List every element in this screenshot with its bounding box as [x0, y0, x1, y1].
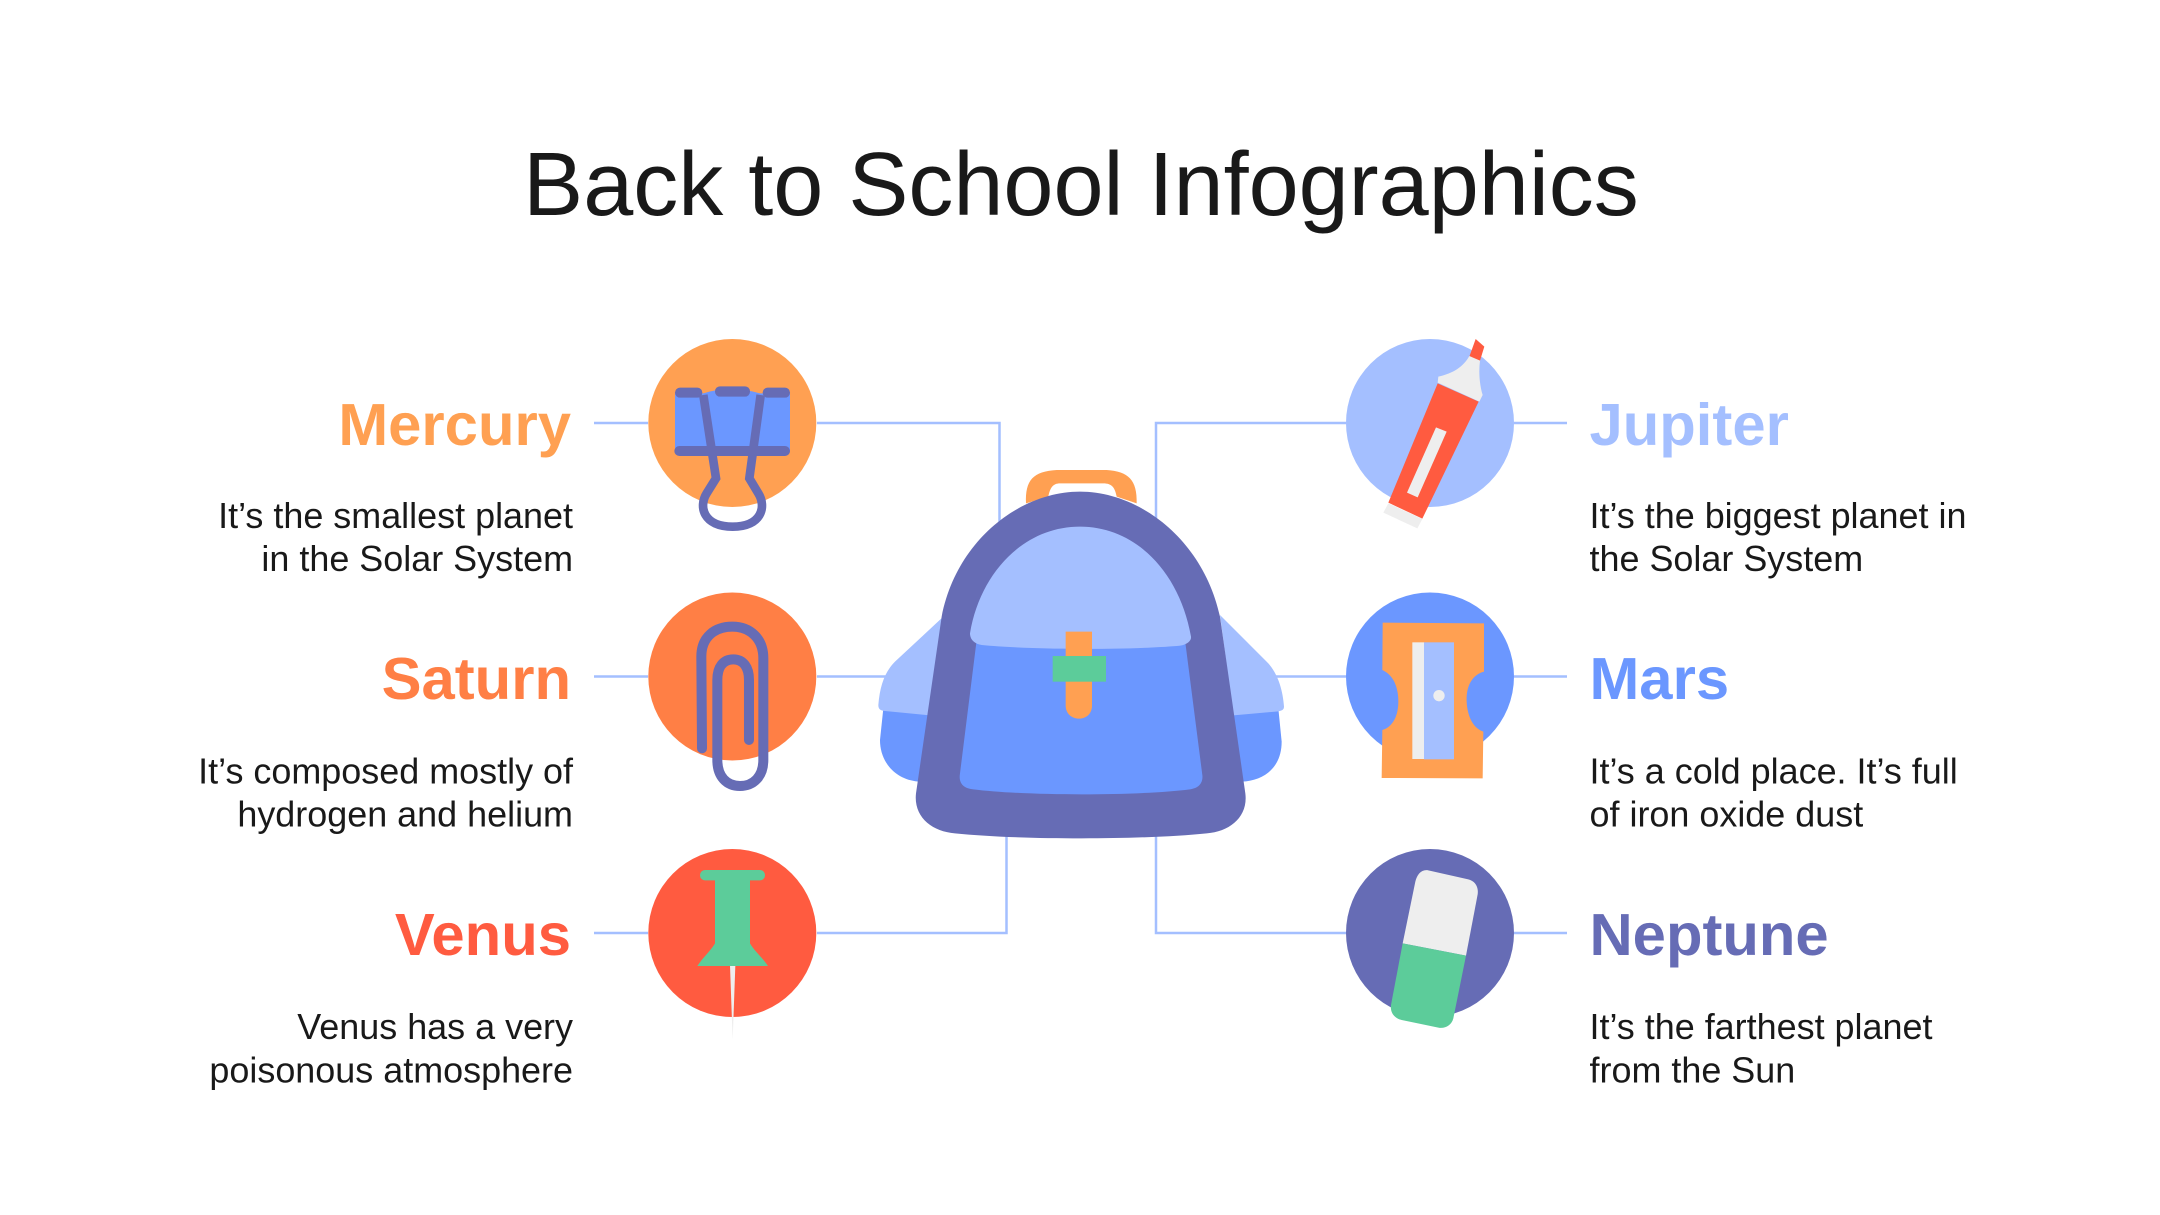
backpack side pocket right	[1233, 708, 1282, 782]
text: Venus description: Venus has a very	[297, 1006, 573, 1047]
backpack handle	[1026, 470, 1137, 503]
panel: Mercury	[218, 339, 816, 579]
title: Back to School Infographics	[523, 135, 1639, 235]
text: Neptune description: It’s the farthest planet	[1590, 1006, 1932, 1047]
backpack buckle	[1053, 656, 1106, 682]
text: Venus description: poisonous atmosphere	[209, 1050, 573, 1090]
heading: Venus: Venus	[395, 901, 571, 968]
panel: Jupiter	[1346, 339, 1966, 579]
text: Saturn description: hydrogen and helium	[237, 794, 573, 834]
connector lines	[594, 423, 1567, 933]
icon: pencil sharpener	[1382, 623, 1484, 778]
icon circle: Jupiter	[1346, 339, 1514, 507]
backpack side flap left	[878, 617, 943, 715]
text: Jupiter description: the Solar System	[1590, 538, 1863, 579]
icon: paper clip	[701, 627, 763, 786]
backpack side pocket left	[880, 708, 932, 782]
backpack side flap right	[1220, 615, 1284, 715]
icon circle: Neptune	[1346, 849, 1514, 1017]
text: Mars description: of iron oxide dust	[1590, 794, 1863, 834]
heading: Neptune: Neptune	[1590, 901, 1829, 968]
panel: Neptune	[1346, 849, 1932, 1090]
backpack front pocket	[960, 640, 1202, 794]
heading: Saturn: Saturn	[382, 645, 571, 712]
icon: push pin	[697, 870, 768, 1040]
backpack	[878, 470, 1284, 838]
text: Mercury description: in the Solar System	[261, 538, 573, 579]
text: Neptune description: from the Sun	[1590, 1050, 1795, 1090]
text: Mars description: It’s a cold place. It’s full	[1590, 750, 1958, 792]
heading: Jupiter: Jupiter	[1590, 391, 1789, 458]
icon: binder clip	[674, 386, 790, 527]
text: Jupiter description: It’s the biggest planet in	[1590, 495, 1966, 536]
text: Saturn description: It’s composed mostly of	[198, 750, 574, 792]
icon circle: Mars	[1346, 592, 1514, 760]
icon circle: Mercury	[648, 339, 816, 507]
icon: highlighter marker	[1383, 339, 1484, 528]
heading: Mercury: Mercury	[338, 391, 571, 458]
backpack strap	[1066, 632, 1092, 719]
icon circle: Saturn	[648, 592, 816, 760]
panel: Saturn	[198, 592, 816, 834]
icon: eraser	[1391, 870, 1478, 1028]
backpack body	[916, 492, 1246, 838]
heading: Mars: Mars	[1590, 645, 1729, 712]
backpack flap	[970, 527, 1191, 649]
text: Mercury description: It’s the smallest planet	[218, 495, 573, 536]
icon circle: Venus	[648, 849, 816, 1017]
panel: Mars	[1346, 592, 1958, 834]
panel: Venus	[209, 849, 816, 1090]
